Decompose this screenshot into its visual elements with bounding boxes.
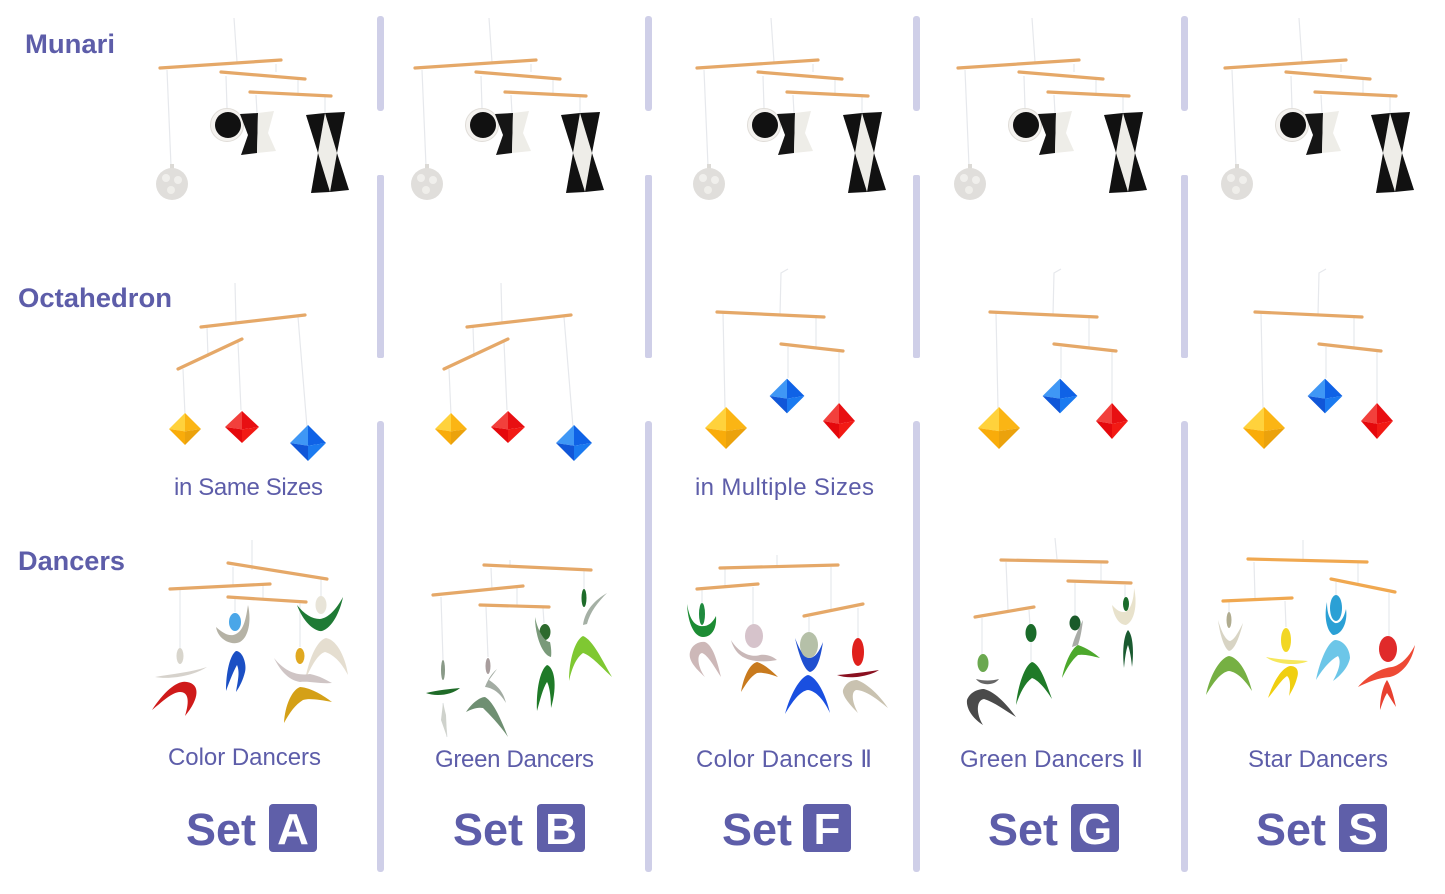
Munari mobile, set G [954,18,1147,200]
caption: in Same Sizes: in Same Sizes [174,474,323,501]
caption: Color Dancers II: Color Dancers Ⅱ [696,746,872,773]
Set B label [453,804,585,855]
Color Dancers mobile, set A [152,540,348,723]
Set F label [722,804,851,855]
Octahedron mobile, set B [435,283,592,461]
Octahedron mobile, set S [1243,269,1393,449]
caption: Green Dancers II: Green Dancers Ⅱ [960,746,1143,773]
Octahedron mobile, set A [169,283,326,461]
Green Dancers mobile, set B [426,560,612,737]
Set A label [186,804,317,855]
divider line 2 [645,16,652,872]
Munari mobile, set S [1221,18,1414,200]
Set S label: S [1348,805,1378,854]
row heading: Octahedron: Octahedron [18,283,172,313]
Set F label: Set [722,804,792,855]
Set A label: Set [186,804,256,855]
divider line 1 [377,16,384,872]
Set G label: G [1078,805,1112,854]
Green Dancers II mobile, set G [967,538,1136,725]
caption: in Multiple Sizes: in Multiple Sizes [695,474,874,501]
Set G label: Set [988,804,1058,855]
row heading: Munari: Munari [25,29,115,59]
divider line 3 [913,16,920,872]
Octahedron mobile, set G [978,269,1128,449]
Munari mobile, set B [411,18,604,200]
caption: Star Dancers: Star Dancers [1248,746,1388,773]
Munari mobile, set A [156,18,349,200]
Set S label [1256,804,1387,855]
Set B label: Set [453,804,523,855]
Color Dancers II mobile, set F [687,555,888,714]
Munari mobile, set F [693,18,886,200]
Octahedron mobile, set F [705,269,855,449]
caption: Green Dancers: Green Dancers [435,746,594,773]
Star Dancers mobile, set S [1206,540,1415,710]
row heading: Dancers: Dancers [18,546,125,576]
Set B label: B [545,805,577,854]
Set S label: Set [1256,804,1326,855]
caption: Color Dancers: Color Dancers [168,744,321,771]
Set F label: F [814,805,840,854]
Set A label: A [277,805,309,854]
divider line 4 [1181,16,1188,872]
Set G label [988,804,1119,855]
